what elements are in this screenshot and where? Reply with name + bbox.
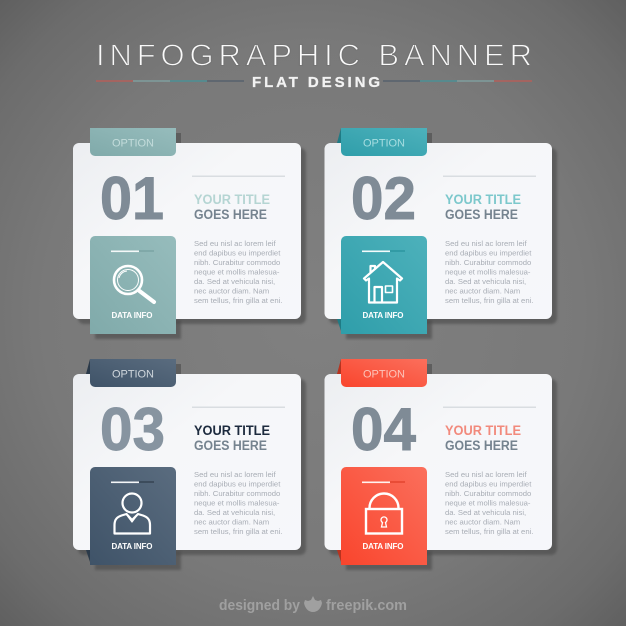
option tab [341, 359, 427, 387]
body text: da. Sed at vehicula nisi, [194, 277, 275, 286]
heading: YOUR TITLE [194, 423, 270, 438]
body text: neque et mollis malesua- [445, 268, 531, 276]
title divider: left [96, 80, 244, 82]
body text: Sed eu nisl ac lorem leif [445, 239, 527, 248]
rule [443, 406, 536, 408]
title divider: right [383, 80, 532, 82]
heading: GOES HERE [194, 207, 267, 222]
option tab: OPTION [363, 368, 405, 380]
number: 03 [100, 396, 165, 463]
footer credit: designed by [219, 598, 300, 614]
heading: YOUR TITLE [445, 423, 521, 438]
heading [445, 192, 521, 222]
data panel [90, 467, 176, 565]
body text: sem tellus, frin gilla at eni. [194, 527, 282, 536]
heading: GOES HERE [194, 438, 267, 453]
label: DATA INFO [362, 311, 404, 320]
body text: nec auctor diam. Nam [194, 518, 269, 526]
icon: freepik mascot [304, 596, 322, 612]
body text: end dapibus eu imperdiet [194, 248, 281, 258]
body text: neque et mollis malesua- [194, 268, 280, 276]
panel line [362, 482, 405, 483]
label: DATA INFO [112, 542, 152, 551]
option tab: OPTION [112, 138, 154, 150]
icon: padlock [366, 494, 402, 534]
heading: GOES HERE [445, 438, 518, 453]
panel: option 02 [324, 128, 557, 339]
panel line [362, 250, 405, 252]
panel: option 03 [73, 359, 306, 570]
body text: end dapibus eu imperdiet [445, 248, 532, 258]
body text [194, 239, 282, 305]
option tab [90, 128, 176, 156]
label: DATA INFO [362, 542, 404, 551]
body text: Sed eu nisl ac lorem leif [194, 239, 276, 248]
rule [443, 176, 536, 177]
number: 02 [351, 165, 416, 232]
footer credit [219, 596, 407, 614]
option tab [90, 359, 176, 387]
icon: magnifier [114, 266, 154, 302]
body text: nibh. Curabitur commodo [194, 489, 280, 498]
data panel [341, 236, 427, 334]
body text: nec auctor diam. Nam [445, 286, 520, 296]
data panel [90, 236, 176, 334]
number: 04 [351, 396, 417, 463]
body text: nec auctor diam. Nam [445, 518, 520, 526]
body text [194, 470, 282, 536]
label: DATA INFO [112, 311, 152, 320]
body text: da. Sed at vehicula nisi, [194, 508, 275, 517]
number: 01 [100, 165, 164, 232]
rule [192, 176, 285, 177]
heading [194, 423, 270, 453]
body text: nec auctor diam. Nam [194, 286, 269, 296]
body text: end dapibus eu imperdiet [194, 480, 281, 488]
option tab: OPTION [112, 368, 154, 380]
body text: nibh. Curabitur commodo [194, 258, 280, 267]
panel: option 01 [73, 128, 306, 339]
body text: sem tellus, frin gilla at eni. [194, 296, 282, 305]
title: INFOGRAPHIC BANNER [96, 38, 532, 72]
heading [194, 192, 270, 222]
heading: YOUR TITLE [194, 192, 270, 207]
panel: option 04 [324, 359, 557, 570]
body text: Sed eu nisl ac lorem leif [194, 470, 276, 479]
icon: person [114, 494, 150, 534]
body text: neque et mollis malesua- [194, 498, 280, 508]
panel line [111, 482, 154, 483]
heading: YOUR TITLE [445, 192, 521, 207]
data panel [341, 467, 427, 565]
body text: Sed eu nisl ac lorem leif [445, 470, 527, 479]
body text: da. Sed at vehicula nisi, [445, 277, 526, 286]
option tab [341, 128, 427, 156]
option tab: OPTION [363, 138, 405, 150]
body text: nibh. Curabitur commodo [445, 258, 531, 267]
footer credit: freepik.com [326, 598, 407, 614]
rule [192, 406, 285, 408]
icon: house [364, 262, 402, 302]
body text [445, 470, 533, 536]
body text [445, 239, 533, 305]
subtitle: FLAT DESING [252, 74, 380, 91]
body text: nibh. Curabitur commodo [445, 489, 531, 498]
body text: neque et mollis malesua- [445, 498, 531, 508]
body text: da. Sed at vehicula nisi, [445, 508, 526, 517]
body text: end dapibus eu imperdiet [445, 480, 532, 488]
body text: sem tellus, frin gilla at eni. [445, 296, 533, 305]
heading [445, 423, 521, 453]
body text: sem tellus, frin gilla at eni. [445, 527, 533, 536]
panel line [111, 250, 154, 252]
heading: GOES HERE [445, 207, 518, 222]
